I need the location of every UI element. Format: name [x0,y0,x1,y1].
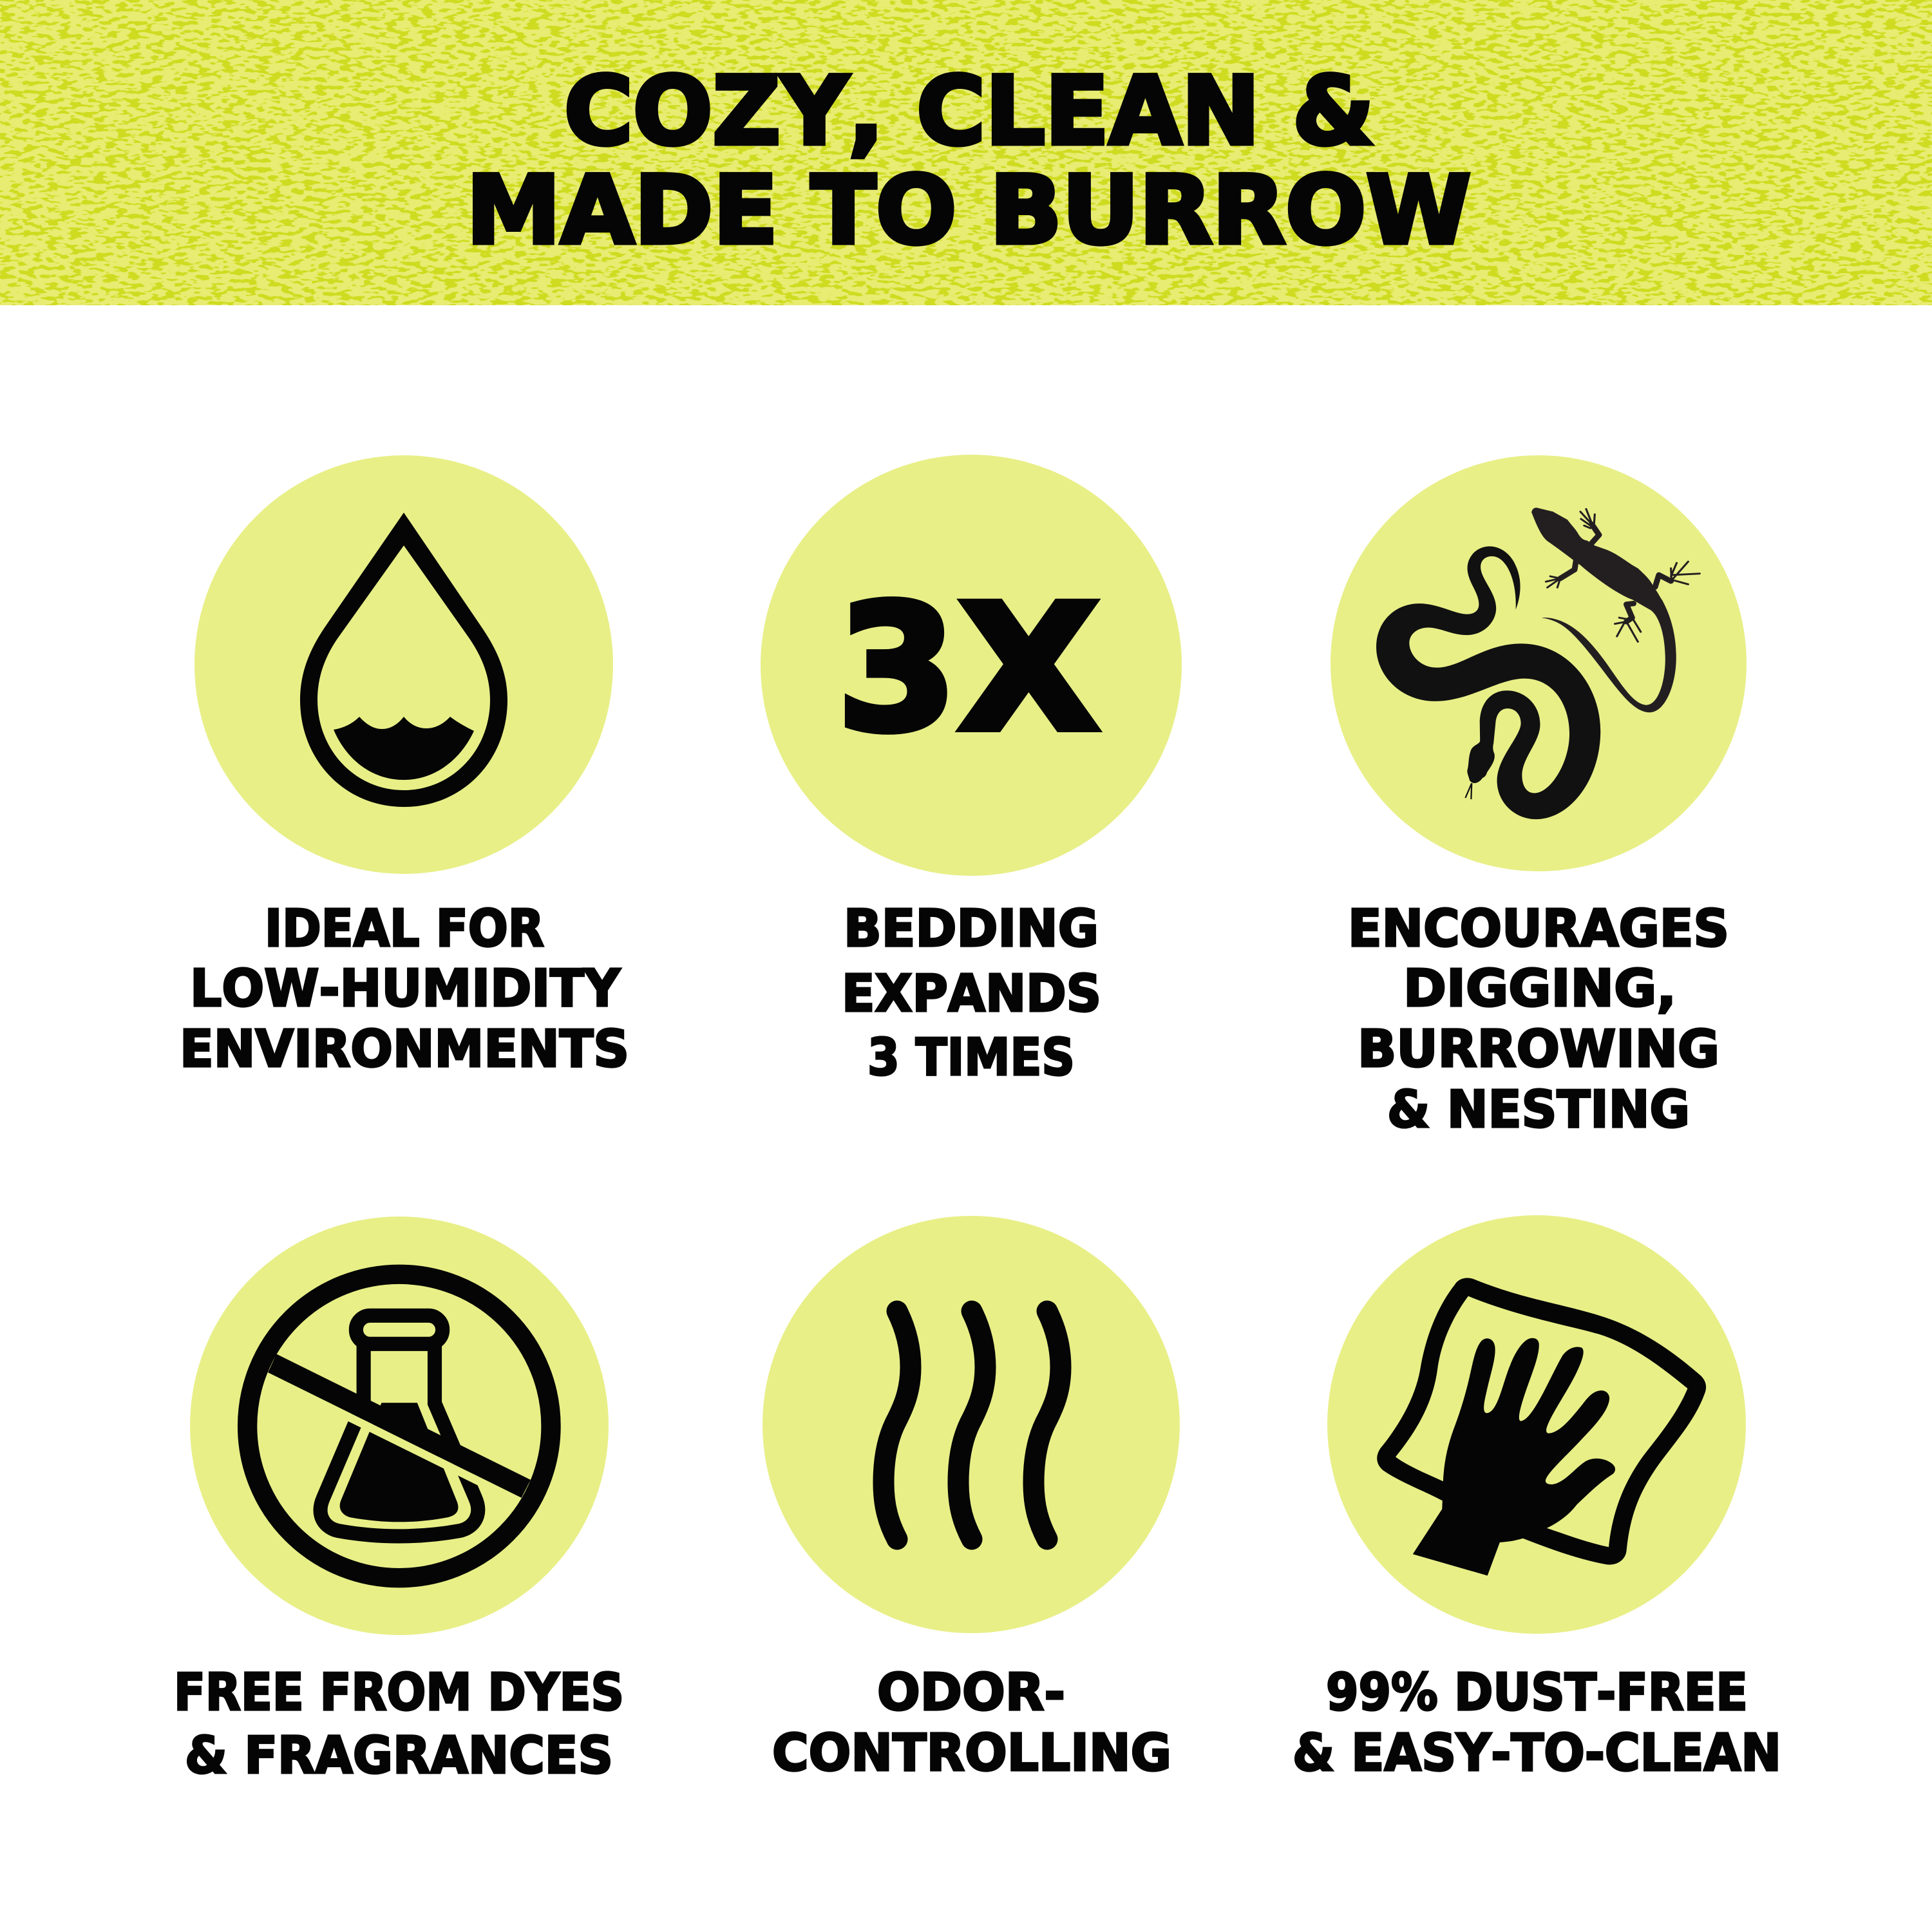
label: free from dyes & fragrances: FREE FROM DYES [174,1663,624,1722]
cloth [1377,1278,1706,1565]
label: bedding expands 3 times: EXPANDS [842,964,1101,1023]
label: encourages digging, burrowing & nesting: ENCOURAGES [1348,899,1729,958]
icon: crossed-out flask [247,1274,551,1578]
panel: odor controlling [762,1216,1180,1783]
icon: hand wiping with cloth [1377,1278,1706,1576]
panel: expands three times [761,455,1182,1087]
flask liquid [340,1403,458,1522]
label: ideal for low-humidity environments: LOW-HUMIDITY [190,959,621,1018]
circle background [761,455,1182,876]
snake [1376,546,1600,819]
label: 99% dust-free & easy-to-clean: 99% DUST-FREE [1326,1663,1748,1722]
label: bedding expands 3 times: BEDDING [844,899,1099,958]
flask outline [321,1316,478,1536]
label: odor-controlling [772,1663,1171,1783]
circle background [194,455,613,874]
icon: 3X [837,569,1099,770]
title: COZY, CLEAN & [564,57,1374,166]
circle background [190,1217,609,1635]
icon: 3X: X [959,569,1099,770]
label: encourages digging, burrowing & nesting: & NESTING [1387,1080,1690,1139]
circle background [762,1216,1180,1633]
prohibition bar [268,1354,531,1498]
panel: digging and burrowing [1331,455,1747,1139]
label: odor-controlling: CONTROLLING [772,1723,1171,1783]
prohibition ring [247,1274,551,1578]
hand [1413,1338,1615,1576]
icon: water drop [300,513,507,807]
label: ideal for low-humidity environments [180,899,629,1079]
header banner with texture [0,0,1932,305]
label: encourages digging, burrowing & nesting [1348,899,1729,1139]
panel: dust-free and easy to clean [1293,1215,1781,1783]
gap below the bar [268,1372,522,1507]
label: ideal for low-humidity environments: IDEAL FOR [265,899,544,958]
icon: 3X: 3 [837,569,957,770]
label: 99% dust-free & easy-to-clean [1293,1663,1781,1783]
label: encourages digging, burrowing & nesting: BURROWING [1358,1019,1719,1079]
label: odor-controlling: ODOR- [877,1663,1065,1722]
label: free from dyes & fragrances: & FRAGRANCES [185,1726,613,1785]
panel: low humidity [180,455,629,1079]
panel: free from dyes and fragrances [174,1217,624,1785]
title [466,57,1471,265]
icon: odor waves [884,1311,1061,1539]
title: MADE TO BURROW [466,156,1471,265]
label: free from dyes & fragrances [174,1663,624,1785]
lizard [1531,507,1700,712]
label: bedding expands 3 times [842,899,1101,1087]
icon: snake and lizard [1376,507,1700,819]
label: 99% dust-free & easy-to-clean: & EASY-TO-CLEAN [1293,1723,1781,1783]
label: encourages digging, burrowing & nesting: DIGGING, [1403,959,1676,1018]
label: ideal for low-humidity environments: ENVIRONMENTS [180,1019,629,1079]
circle background [1327,1215,1746,1634]
label: bedding expands 3 times: 3 TIMES [867,1028,1075,1087]
circle background [1331,455,1747,871]
